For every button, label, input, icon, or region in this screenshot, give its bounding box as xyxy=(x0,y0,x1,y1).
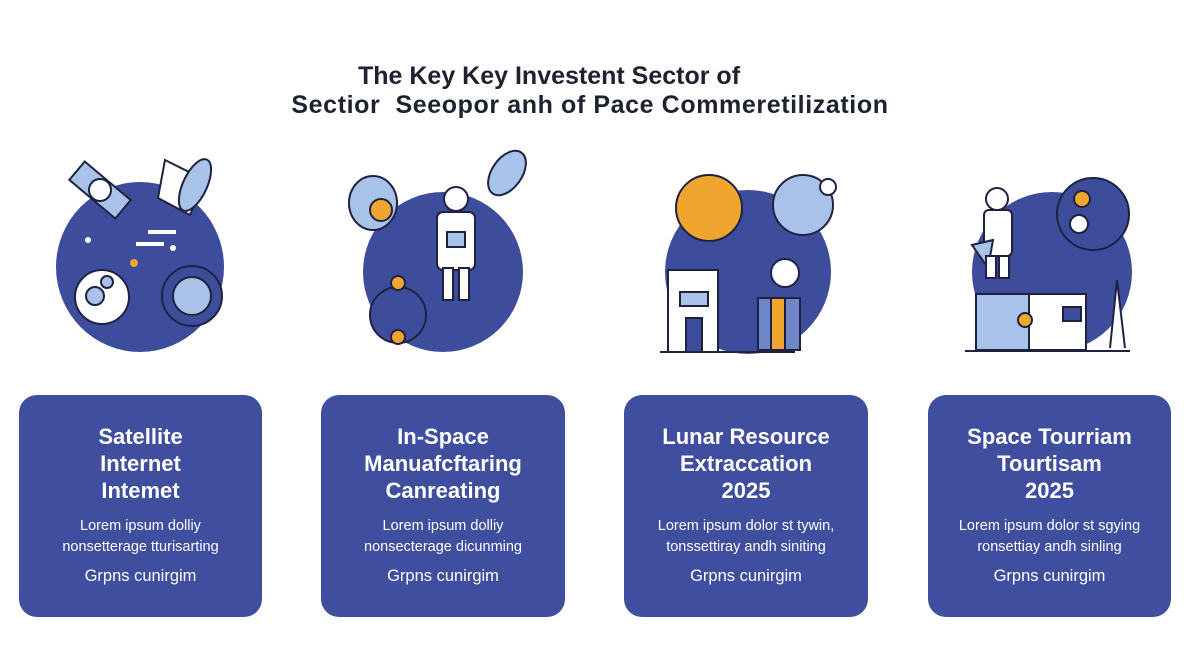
icon: space tourism xyxy=(965,178,1132,352)
card: lunar resource extraction: Grpns cunirgim xyxy=(690,567,802,585)
card: space tourism: ronsettiay andh sinling xyxy=(977,539,1122,555)
icon: lunar resource extraction xyxy=(660,175,836,354)
card: space tourism: 2025 xyxy=(1025,478,1074,503)
card: in-space manufacturing: Manuafcftaring xyxy=(364,451,522,476)
card: in-space manufacturing: Grpns cunirgim xyxy=(387,567,499,585)
card: satellite internet: Lorem ipsum dolliy xyxy=(80,518,201,534)
card: in-space manufacturing: Canreating xyxy=(386,478,500,503)
card: lunar resource extraction: Lorem ipsum dolor st tywin, xyxy=(658,518,834,534)
card: lunar resource extraction: tonssettiray andh siniting xyxy=(666,539,826,555)
card: lunar resource extraction: Lunar Resource xyxy=(662,424,830,449)
card: satellite internet: Satellite xyxy=(98,424,183,449)
card: satellite internet: Grpns cunirgim xyxy=(85,567,196,585)
title: The Key Key Investent Sector of xyxy=(358,62,740,90)
card: in-space manufacturing: nonsecterage dicunming xyxy=(364,539,522,555)
card: space tourism: Tourtisam xyxy=(997,451,1102,476)
card: in-space manufacturing: In-Space xyxy=(397,424,489,449)
title xyxy=(291,62,889,119)
card: space tourism xyxy=(928,395,1171,617)
title: Sectior Seeopor anh of Pace Commeretilization xyxy=(291,91,889,119)
card: satellite internet xyxy=(19,395,262,617)
card: lunar resource extraction xyxy=(624,395,868,617)
icon: in-space manufacturing xyxy=(349,144,534,352)
card: lunar resource extraction: Extraccation xyxy=(680,451,812,476)
card: space tourism: Space Tourriam xyxy=(967,424,1132,449)
card: satellite internet: Internet xyxy=(100,451,181,476)
card: satellite internet: Intemet xyxy=(101,478,180,503)
icon: satellite internet xyxy=(56,155,224,352)
card: in-space manufacturing: Lorem ipsum dolliy xyxy=(383,518,503,534)
card: lunar resource extraction: 2025 xyxy=(722,478,770,503)
card: space tourism: Grpns cunirgim xyxy=(994,567,1105,585)
card: satellite internet: nonsetterage tturisarting xyxy=(62,539,219,555)
card: space tourism: Lorem ipsum dolor st sgying xyxy=(959,518,1140,534)
illustrations xyxy=(56,150,1132,354)
card: in-space manufacturing xyxy=(321,395,565,617)
